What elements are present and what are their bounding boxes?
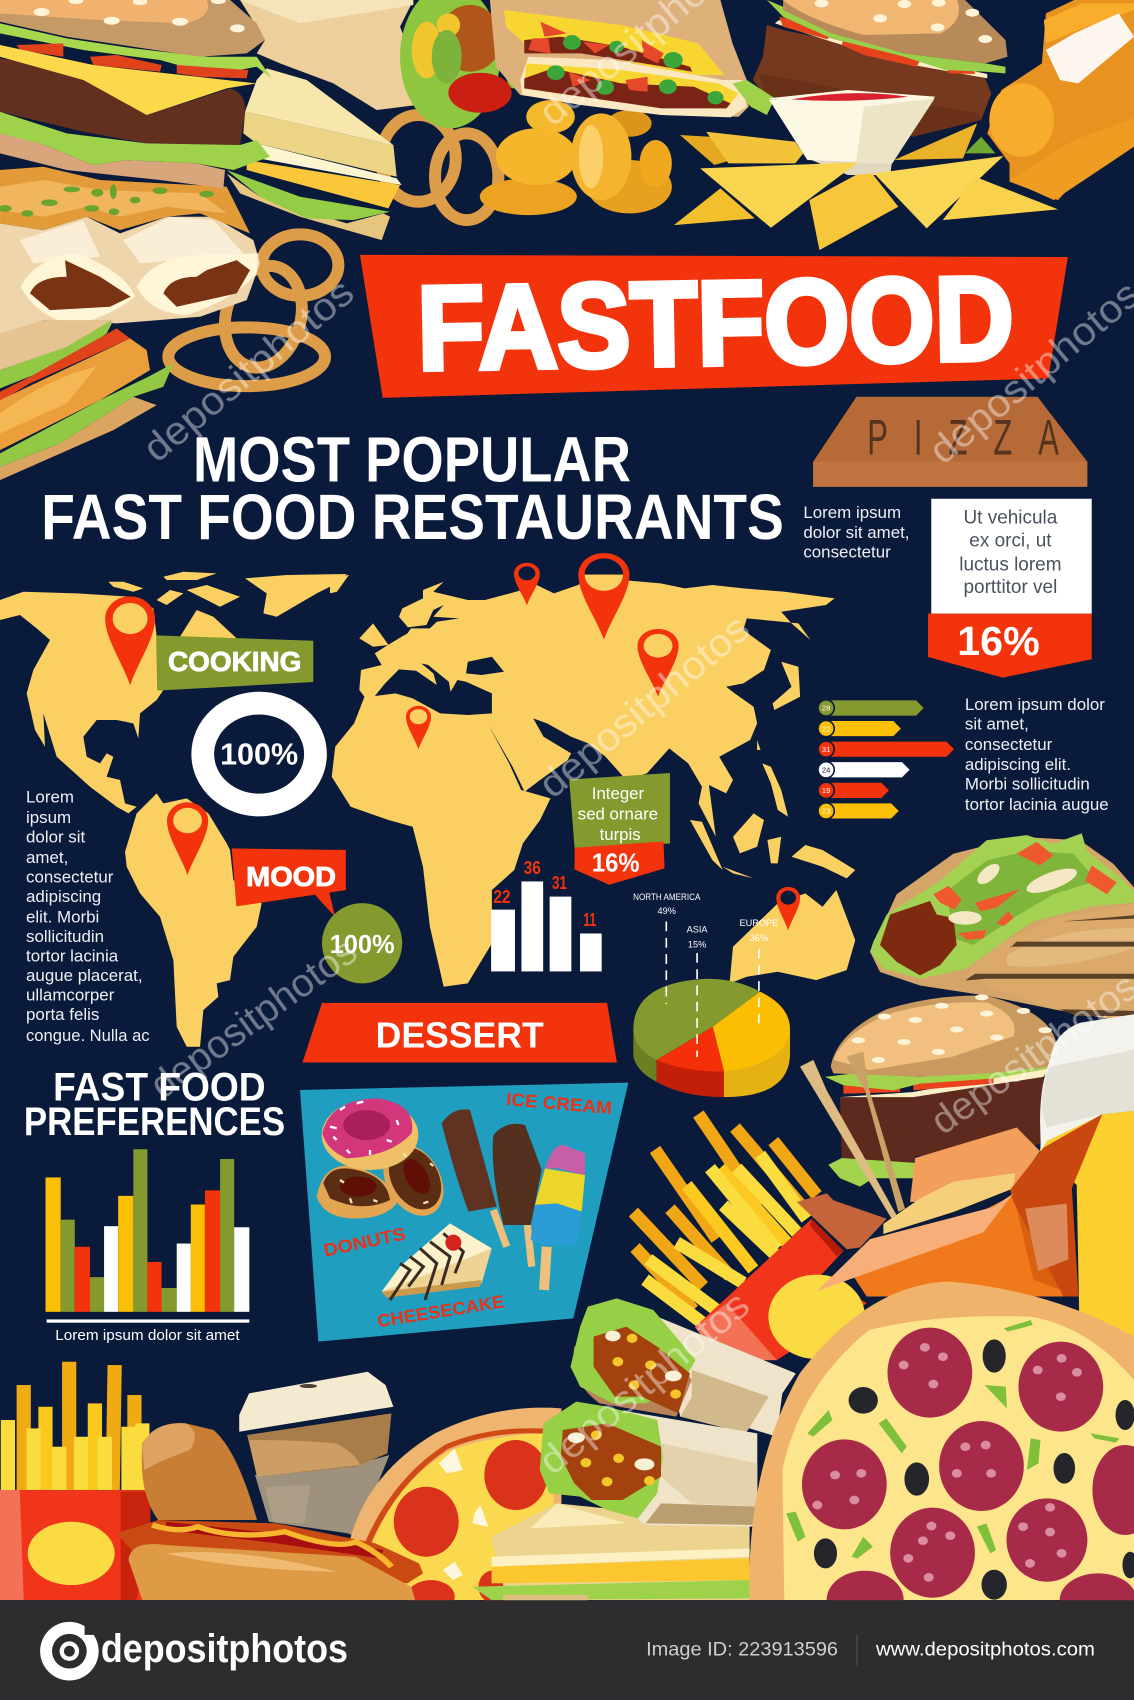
text: left note: elit. Morbi [26,908,99,927]
pie labels and leader lines: 49% [658,906,676,916]
bars: right side chart: 24 [822,765,830,774]
pie chart [633,979,790,1097]
text: top right note [803,503,910,561]
callout card: 16 percent: Ut vehicula [963,508,1058,529]
Iceland [330,575,349,593]
Black sea [466,657,504,675]
Taiwan and Philippines [757,740,788,817]
food: noodle box [817,1114,1102,1297]
column chart: 31 [552,872,567,893]
text: top right note: consectetur [803,542,891,561]
food: onion rings [168,115,498,386]
title text: FASTFOOD [416,252,1015,396]
bars: right side chart: 28 [822,704,830,713]
food: right taco [870,833,1134,1023]
callout tag: 16 percent: 16% [592,848,640,878]
callout tag: 16 percent: sed ornare [578,805,658,824]
food: top left burger [0,0,272,188]
food: coffee cup [239,1372,393,1537]
watermarks: depositphotos [143,930,365,1108]
Greenland [245,574,347,617]
text: left note: adipiscing [26,887,101,906]
text: right note: consectetur [965,735,1053,754]
food: fries box left [0,1490,150,1600]
food: medium pizza [350,1408,561,1613]
Arctic islands [108,572,240,607]
food: bottom left group [0,1362,561,1613]
text: right note [965,695,1109,814]
bars: right side chart: 19 [822,786,830,795]
dessert card: DONUTS [322,1224,407,1261]
heading: preferences [24,1065,285,1144]
food: fries right [633,1114,817,1324]
pie labels and leader lines: 36% [750,933,768,943]
pin: Australia [776,887,800,930]
watermarks: depositphotos [531,607,758,807]
bars: right side chart: 23 [822,807,830,816]
text: left note: consectetur [26,868,114,887]
icon: camera logo [40,1622,99,1680]
ring: 100 percent [203,703,315,805]
dessert card: ICE CREAM [505,1089,613,1118]
Quebec [180,610,237,647]
footer bar: Image ID: 223913596 [646,1640,838,1661]
Japan [773,662,800,710]
food: right burger [825,994,1057,1187]
green circle: 100 percent: 100% [330,929,395,959]
mood label: MOOD [246,860,336,892]
text: left note: ullamcorper [26,986,115,1005]
callout card: 16 percent: 16% [957,618,1040,664]
food: burrito one [570,1298,796,1437]
food: quesadilla [490,0,749,117]
food: nachos back [680,123,977,165]
food: sauce cup [768,90,936,175]
pizza box: PIZZA [867,409,1059,465]
food: left sub sandwich [0,320,173,480]
watermarks [135,0,1134,1484]
Sumatra and Java [690,820,754,878]
world map: Americas [0,572,347,1047]
Sulawesi [767,837,781,863]
pie labels and leader lines: 15% [688,940,706,950]
icon: ice cream bars [442,1109,585,1290]
bars: right side chart [818,700,954,819]
food: chopsticks [800,1051,905,1219]
food: fried chicken [987,0,1134,200]
title banner [360,252,1068,398]
callout card: 16 percent: luctus lorem [959,554,1062,575]
text: left note: porta felis [26,1005,99,1024]
heading: most popular: MOST POPULAR [193,423,631,495]
text: top right note: Lorem ipsum [803,503,901,522]
Eurasia and Africa [332,578,835,987]
text: right note: Morbi sollicitudin [965,774,1090,793]
heading: most popular [41,423,784,553]
food: right side group [633,833,1134,1360]
Australia [730,890,855,983]
food: burrito two [540,1402,757,1527]
world map: Eurasia, Africa, Australia [330,575,855,987]
heading: most popular: FAST FOOD RESTAURANTS [41,481,784,553]
food: top right burger [733,0,1007,153]
South America [125,793,262,1047]
ring: 100 percent: 100% [220,738,298,771]
text: left note: sollicitudin [26,927,104,946]
text: top right note: dolor sit amet, [803,523,910,542]
heading: preferences: PREFERENCES [24,1100,285,1144]
text: right note: sit amet, [965,715,1029,734]
pin: Africa [406,706,431,749]
bars: right side chart: 22 [822,724,830,733]
dessert banner [302,1003,617,1062]
text: right note: Lorem ipsum dolor [965,695,1105,714]
text: left note: augue placerat, [26,966,143,985]
callout tag: 16 percent: turpis [600,825,641,844]
pin: Russia large [578,553,629,640]
food: nachos front [674,156,1058,250]
callout card: 16 percent: ex orci, ut [969,530,1052,551]
pie labels and leader lines: NORTH AMERICA [633,892,701,902]
pie labels and leader lines: EUROPE [739,918,778,928]
pin: North America [105,596,155,685]
text: left note: congue. Nulla ac [26,1026,150,1045]
watermarks: depositphotos [921,273,1134,473]
bars: right side chart: 31 [822,745,830,754]
pie labels and leader lines: ASIA [687,924,708,934]
North America [0,592,163,813]
food: nuggets [480,100,672,215]
food: fries box [695,1193,887,1360]
callout tag: 16 percent: Integer [592,784,645,803]
watermarks: depositphotos [135,271,362,471]
dessert card [300,1083,628,1342]
column chart: 36 [524,857,541,878]
cooking label: COOKING [168,645,301,677]
text: right note: adipiscing elit. [965,755,1071,774]
text: left note: tortor lacinia [26,947,119,966]
text: left note: ipsum [26,808,71,827]
food: left wraps [0,167,260,337]
food: top left group [0,0,524,480]
mood label [232,848,346,917]
icon: cheesecake [382,1223,492,1300]
green circle: 100 percent [322,903,402,983]
pie labels and leader lines [633,892,778,1057]
column chart [491,857,602,971]
Baltic sea [408,605,459,633]
UK [359,623,389,647]
watermarks: depositphotos [531,1283,758,1484]
preferences bar chart [46,1149,249,1344]
footer bar: www.depositphotos.com [875,1640,1095,1661]
text: left note: Lorem [26,787,74,806]
food: sandwich [227,68,402,240]
text: left note: dolor sit [26,827,86,846]
banner ribbon [360,255,1068,398]
text: right note: tortor lacinia augue [965,795,1109,814]
text: left note [26,787,150,1045]
pin: Russia small [514,563,540,605]
preferences bar chart: Lorem ipsum dolor sit amet [55,1327,240,1344]
icon: donuts [317,1098,456,1227]
New Guinea [792,845,855,878]
food: beer glass [1040,1014,1134,1360]
dessert banner: DESSERT [376,1015,544,1055]
cooking label [156,635,313,691]
food: drumstick [142,1423,257,1520]
Borneo [733,813,764,853]
food: burrito wrap [240,0,524,128]
dessert card: CHEESECAKE [376,1291,506,1331]
food: bottom right group [472,1282,1134,1629]
callout tag: 16 percent [569,773,670,885]
callout card: 16 percent: porttitor vel [963,577,1057,598]
footer bar: depositphotos [101,1627,348,1671]
heading: preferences: FAST FOOD [53,1065,266,1109]
column chart: 11 [583,909,596,930]
pin: Asia [637,629,679,696]
food: hot dog [117,1520,423,1600]
map pins [105,553,800,930]
food: fries left [8,1362,142,1490]
callout card: 16 percent [928,499,1092,678]
food: large pizza [749,1282,1134,1629]
footer bar [0,1600,1134,1700]
pizza box [813,397,1087,487]
pin: South America [167,802,208,875]
Mediterranean sea [375,663,492,715]
food: bottom sandwich [472,1503,761,1601]
food: top right group [480,0,1134,250]
column chart: 22 [493,886,511,907]
text: left note: amet, [26,848,68,867]
